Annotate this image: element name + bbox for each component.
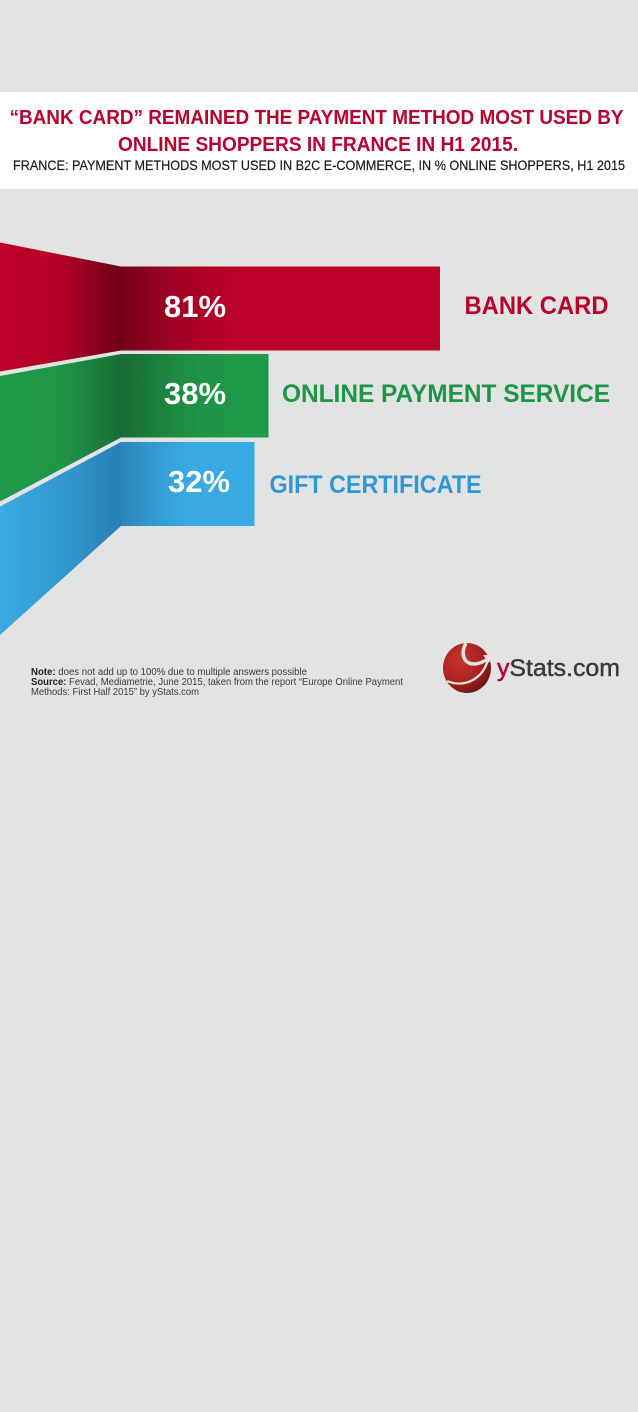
footnote: Methods: First Half 2015” by yStats.com [31, 687, 199, 698]
footnote: Note: does not add up to 100% due to multiple answers possible [31, 667, 307, 678]
title [10, 107, 624, 156]
title: ONLINE SHOPPERS IN FRANCE IN H1 2015. [118, 134, 518, 156]
footnote: Source: Fevad, Mediametrie, June 2015, taken from the report “Europe Online Payment [31, 677, 403, 688]
value: 38%: 38% [164, 377, 226, 411]
label: gift certificate: GIFT CERTIFICATE [270, 471, 482, 499]
funnel bar: online payment service 38% [0, 354, 268, 502]
label: online payment service: ONLINE PAYMENT SERVICE [282, 380, 610, 408]
icon: red globe with arrow [443, 643, 492, 693]
value: 81%: 81% [164, 290, 226, 324]
label: bank card: BANK CARD [464, 292, 608, 320]
funnel bar: bank card 81% [0, 242, 440, 372]
logo: yStats.com [443, 643, 620, 693]
title band [0, 92, 638, 189]
footnote [31, 667, 403, 698]
funnel bar: gift certificate 32% [0, 442, 254, 635]
value: 32%: 32% [168, 465, 230, 499]
logo text: yStats.com [497, 655, 620, 682]
